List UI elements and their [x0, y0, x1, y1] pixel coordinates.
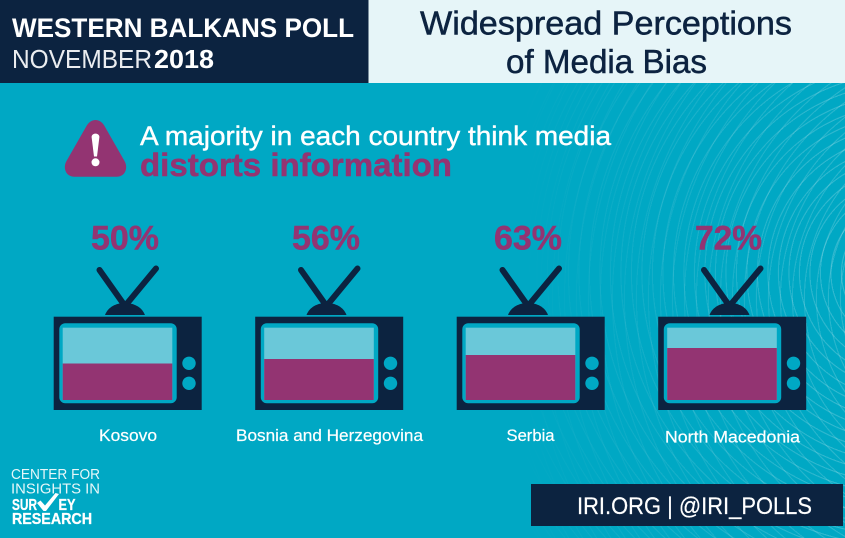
logo: Center for Insights in Survey Research: INSIGHTS IN: [11, 480, 100, 498]
header panel: poll name and date: NOVEMBER: [12, 44, 152, 74]
logo: Center for Insights in Survey Research: EY: [58, 497, 76, 514]
tv chart: Kosovo 50%: 50%: [91, 220, 159, 258]
headline text: A majority in each country think media: [140, 121, 612, 151]
tv chart: Serbia 63%: 63%: [494, 220, 562, 258]
header panel: poll name and date: [0, 0, 368, 83]
icon: warning triangle: [65, 120, 126, 177]
tv chart: North Macedonia 72%: [658, 220, 806, 446]
tv chart: North Macedonia 72%: 72%: [695, 220, 762, 258]
footer banner: website and handle: IRI.ORG | @IRI_POLLS: [577, 493, 812, 520]
tv chart: Serbia 63%: Serbia: [506, 427, 555, 445]
headline text: [140, 121, 612, 183]
title panel: [368, 0, 845, 83]
logo: Center for Insights in Survey Research: CENTER FOR: [11, 466, 100, 483]
tv chart: Serbia 63%: [457, 220, 605, 445]
header panel: poll name and date: 2018: [154, 44, 214, 74]
tv chart: Bosnia and Herzegovina 56%: [236, 220, 424, 445]
headline text: distorts information: [140, 147, 452, 183]
title panel: Widespread Perceptions: [420, 4, 792, 42]
logo: Center for Insights in Survey Research: RESEARCH: [12, 511, 92, 528]
tv chart: Bosnia and Herzegovina 56%: 56%: [292, 220, 360, 258]
header panel: poll name and date: WESTERN BALKANS POLL: [12, 13, 354, 43]
tv chart: Kosovo 50%: Kosovo: [99, 427, 157, 445]
title panel: of Media Bias: [506, 43, 707, 80]
footer banner: website and handle: [531, 484, 843, 526]
logo: Center for Insights in Survey Research: SUR: [12, 497, 37, 514]
tv chart: North Macedonia 72%: North Macedonia: [665, 428, 801, 446]
tv chart: Bosnia and Herzegovina 56%: Bosnia and Herzegovina: [236, 427, 424, 445]
logo: Center for Insights in Survey Research: [11, 466, 100, 528]
tv chart: Kosovo 50%: [54, 220, 202, 445]
